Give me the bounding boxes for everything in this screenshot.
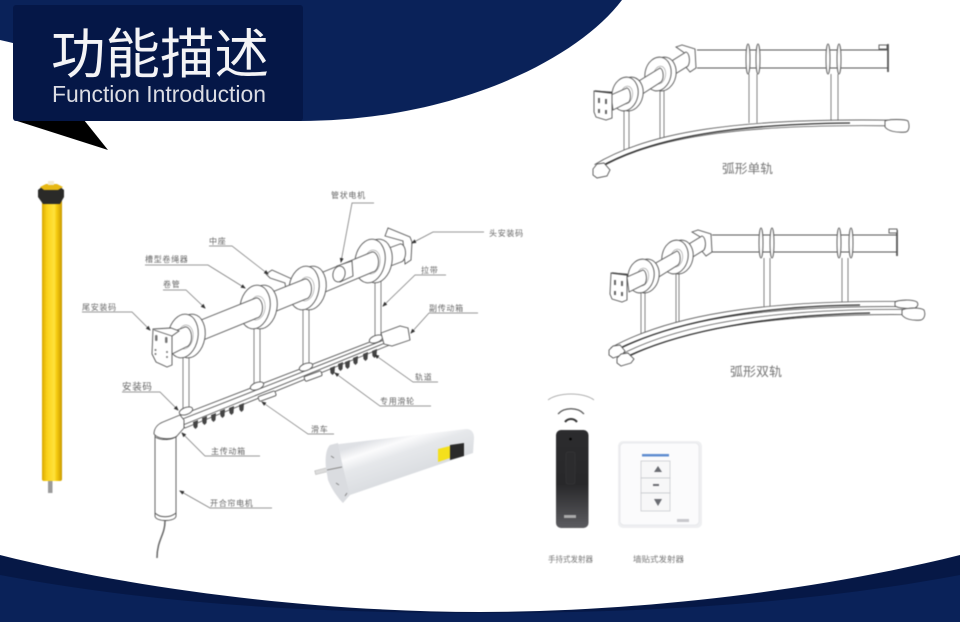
pulleys bbox=[193, 349, 377, 429]
signal arcs bbox=[548, 394, 594, 422]
wall plate bbox=[610, 273, 628, 302]
label: mounting code bbox=[122, 381, 178, 410]
label: tail bracket bbox=[82, 302, 150, 330]
label: slider bbox=[262, 402, 334, 434]
ring 2 bbox=[642, 55, 679, 93]
label: tail bracket: 尾安装码 bbox=[82, 302, 117, 312]
hangers bbox=[624, 74, 838, 150]
tube between rings bbox=[629, 68, 663, 102]
double arc track diagram bbox=[609, 228, 925, 379]
tube stub bbox=[611, 88, 630, 110]
wall plate bbox=[594, 91, 612, 120]
straight tube bbox=[697, 50, 888, 68]
title tab tail bbox=[14, 120, 108, 150]
roller tube section 3 to 4 bbox=[306, 252, 379, 300]
caption: 弧形双轨 bbox=[730, 365, 783, 379]
handheld caption: 手持式发射器 bbox=[548, 554, 593, 564]
corner bracket bbox=[676, 45, 696, 72]
thin rings bbox=[759, 228, 853, 258]
end plate bbox=[889, 229, 897, 256]
far angled tube bbox=[662, 52, 689, 81]
curtain rail bbox=[176, 333, 392, 428]
label: roller tube bbox=[163, 279, 205, 308]
hangers bbox=[641, 258, 848, 338]
tube stub bbox=[627, 270, 646, 292]
label: roller tube: 卷管 bbox=[163, 279, 180, 289]
label: secondary box bbox=[411, 303, 478, 333]
label: center seat bbox=[209, 236, 268, 274]
label: track: 轨道 bbox=[415, 372, 432, 382]
label: belt: 拉带 bbox=[421, 265, 438, 275]
corner bracket bbox=[692, 230, 712, 256]
label: mounting code: 安装码 bbox=[122, 381, 153, 393]
ring 3 bbox=[285, 264, 330, 312]
mounting bracket right bbox=[378, 228, 412, 270]
label: pulley bbox=[335, 373, 431, 406]
end plate bbox=[879, 44, 888, 72]
white curtain motor product bbox=[315, 429, 474, 503]
secondary transmission box bbox=[381, 326, 410, 346]
straight tube bbox=[712, 235, 897, 252]
ring 2 bbox=[236, 283, 281, 331]
ring 2 bbox=[659, 238, 696, 276]
bottom navy curved band bbox=[0, 575, 960, 622]
label: slider: 滑车 bbox=[311, 424, 328, 434]
tube stub bbox=[170, 327, 192, 354]
label: main box: 主传动箱 bbox=[211, 446, 246, 456]
roller tube section 1 to 2 bbox=[186, 298, 263, 347]
label: tubular motor bbox=[331, 190, 374, 262]
sliders bbox=[178, 405, 194, 417]
handheld remote with signal arcs bbox=[548, 394, 594, 528]
label: rope winder bbox=[145, 254, 245, 288]
thin rings bbox=[746, 44, 841, 74]
label: track bbox=[375, 355, 438, 382]
label: head bracket bbox=[412, 228, 524, 243]
far angled tube bbox=[679, 236, 705, 265]
label: curtain motor bbox=[180, 491, 272, 508]
mounting bracket left bbox=[152, 328, 179, 367]
ring 4 bbox=[351, 237, 396, 285]
label: pulley: 专用滑轮 bbox=[380, 396, 415, 406]
label: belt bbox=[383, 265, 446, 306]
remote body bbox=[556, 430, 588, 528]
caption: 弧形单轨 bbox=[722, 162, 773, 176]
title box bbox=[13, 5, 303, 121]
label: head bracket: 头安装码 bbox=[489, 228, 524, 238]
hangers bbox=[183, 276, 381, 412]
tubular motor cylinder bbox=[331, 261, 353, 283]
ring 1 bbox=[625, 257, 662, 295]
center seat bbox=[266, 270, 292, 298]
bottom dark curved band bbox=[0, 555, 960, 622]
label: rope winder: 槽型卷绳器 bbox=[145, 254, 188, 264]
yellow tubular motor bbox=[38, 181, 64, 493]
curved rail bbox=[593, 120, 909, 178]
label: center seat: 中座 bbox=[209, 236, 226, 246]
tube between rings bbox=[645, 251, 680, 285]
title: 功能描述 bbox=[51, 25, 269, 85]
top navy curved banner bbox=[0, 0, 622, 121]
label: secondary box: 副传动箱 bbox=[429, 303, 464, 313]
roller tube section 2 to 3 bbox=[257, 279, 312, 319]
wall caption: 墙贴式发射器 bbox=[633, 554, 684, 564]
subtitle: Function Introduction bbox=[52, 81, 266, 107]
wall-mounted transmitter bbox=[618, 441, 702, 528]
curved rails bbox=[609, 300, 925, 366]
label: main box bbox=[182, 433, 260, 456]
ring 1 bbox=[609, 75, 646, 113]
main curtain diagram bbox=[82, 190, 524, 558]
main transmission box and curtain motor bbox=[154, 415, 184, 558]
label: curtain motor: 开合帘电机 bbox=[210, 498, 254, 508]
single arc track diagram bbox=[593, 44, 909, 178]
ring 1 bbox=[164, 312, 209, 360]
label: tubular motor: 管状电机 bbox=[331, 190, 366, 200]
